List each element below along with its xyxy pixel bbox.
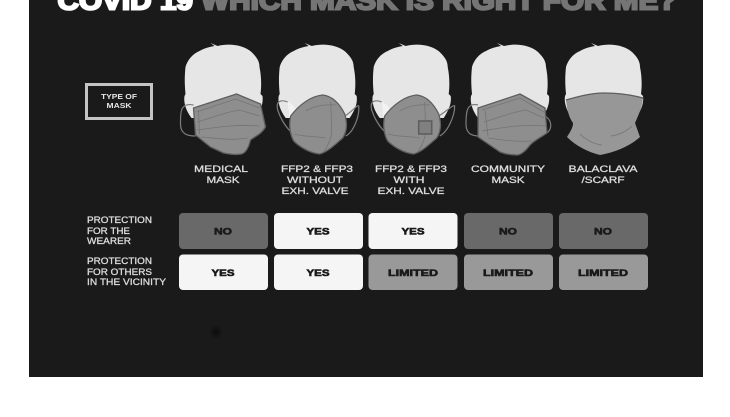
row 2 cell: balaclava limited	[559, 254, 648, 290]
row 2 cell: ffp without valve yes: YES	[306, 268, 330, 279]
label: FFP2 and FFP3 with valve	[375, 164, 447, 197]
row 1 cell: ffp with valve yes	[368, 213, 458, 249]
row 1 cell: ffp without valve yes	[274, 213, 363, 249]
row label: protection for the wearer: PROTECTION	[87, 215, 152, 226]
label: FFP2 and FFP3 with valve: FFP2 & FFP3	[375, 164, 447, 175]
label: community mask	[471, 164, 546, 186]
smudge mark	[209, 325, 223, 339]
row label: protection for others	[87, 256, 167, 288]
label: balaclava scarf: BALACLAVA	[568, 164, 638, 175]
row 1 cell: ffp without valve yes: YES	[306, 226, 330, 238]
label: FFP2 and FFP3 without valve	[281, 164, 353, 197]
label: medical mask: MASK	[206, 175, 240, 186]
type of mask box: MASK	[106, 103, 132, 110]
row 1 cell: balaclava no	[559, 213, 648, 249]
label: balaclava scarf: /SCARF	[582, 175, 625, 186]
label: community mask: COMMUNITY	[471, 164, 546, 175]
type of mask box	[86, 84, 152, 118]
row 2 cell: ffp with valve limited: LIMITED	[388, 268, 438, 279]
row 1 cell: medical no: NO	[214, 226, 232, 238]
type of mask box: TYPE OF	[101, 94, 138, 101]
row 2 cell: balaclava limited: LIMITED	[578, 268, 628, 279]
row label: protection for others: PROTECTION	[87, 256, 152, 267]
row label: protection for the wearer: FOR THE	[87, 226, 130, 237]
row 2 cell: community limited: LIMITED	[483, 268, 533, 279]
row 2 cell: medical yes	[179, 254, 268, 290]
label: FFP2 and FFP3 without valve: EXH. VALVE	[282, 186, 348, 197]
label: FFP2 and FFP3 with valve: EXH. VALVE	[378, 186, 444, 197]
label: community mask: MASK	[492, 175, 525, 186]
row label: protection for the wearer: WEARER	[87, 236, 131, 247]
label: FFP2 and FFP3 without valve: WITHOUT	[287, 175, 343, 186]
icon: medical mask	[180, 43, 266, 154]
icon: community mask	[466, 43, 551, 155]
row 2 cell: ffp without valve yes	[274, 254, 363, 290]
row 2 cell: ffp with valve limited	[368, 254, 458, 290]
label: FFP2 and FFP3 without valve: FFP2 & FFP3	[281, 164, 353, 175]
icon: FFP2 FFP3 with valve	[371, 43, 455, 154]
row 1 cell: balaclava no: NO	[594, 226, 612, 238]
row label: protection for others: FOR OTHERS	[87, 267, 152, 278]
row label: protection for the wearer	[87, 215, 152, 247]
row 1 cell: ffp with valve yes: YES	[402, 226, 424, 238]
row 2 cell: community limited	[464, 254, 553, 290]
icon: balaclava scarf	[565, 43, 643, 155]
row 1 cell: community no	[464, 213, 553, 249]
label: balaclava scarf	[568, 164, 638, 186]
row 2 cell: medical yes: YES	[212, 268, 234, 279]
label: medical mask: MEDICAL	[194, 164, 248, 175]
icon: FFP2 FFP3 without valve	[277, 43, 359, 154]
label: medical mask	[194, 164, 248, 186]
row 1 cell: medical no	[179, 213, 268, 249]
label: FFP2 and FFP3 with valve: WITH	[394, 175, 425, 186]
row label: protection for others: IN THE VICINITY	[87, 277, 167, 288]
row 1 cell: community no: NO	[499, 226, 517, 238]
